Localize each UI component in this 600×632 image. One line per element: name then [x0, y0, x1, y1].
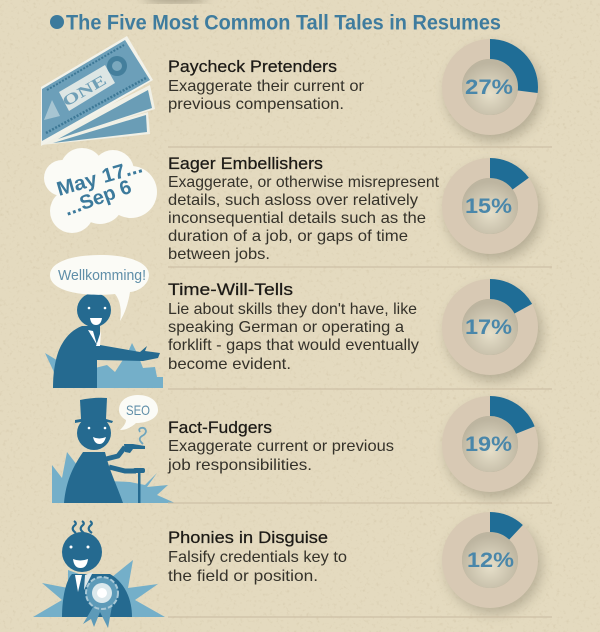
- icon: greeting figure: [45, 283, 163, 388]
- description: Eager Embellishers: [168, 174, 440, 263]
- icon: dollar bills: [41, 36, 155, 146]
- donut chart: 12%: 12%: [467, 549, 514, 572]
- description: Time-Will-Tells: [168, 301, 419, 373]
- panel: Time-Will-Tells: [45, 255, 542, 388]
- speech bubble: Wellkomming!: Wellkomming!: [58, 268, 146, 284]
- heading: Phonies in Disguise: Phonies in Disguise: [168, 528, 328, 547]
- panel: Paycheck Pretenders: [41, 36, 542, 146]
- description: Eager Embellishers: between jobs.: [168, 246, 270, 263]
- title: The Five Most Common Tall Tales in Resumes: [66, 12, 501, 34]
- icon: date cloud: [44, 148, 157, 233]
- donut chart: 12%: [446, 518, 542, 614]
- description: Paycheck Pretenders: [168, 78, 365, 113]
- description: Eager Embellishers: Exaggerate, or otherwise misrepresent: [168, 174, 440, 191]
- donut chart: 15%: 15%: [465, 195, 512, 218]
- donut chart: 19%: 19%: [465, 433, 512, 456]
- donut chart: 19%: [446, 402, 542, 498]
- heading: Paycheck Pretenders: Paycheck Pretenders: [168, 57, 337, 76]
- speech bubble: Wellkomming!: [50, 255, 149, 321]
- description: Eager Embellishers: details, such asloss over relatively: [168, 192, 418, 209]
- icon: dollar bills: ONE: [60, 73, 110, 110]
- description: Eager Embellishers: inconsequential details such as the: [168, 210, 426, 227]
- donut chart: 27%: [446, 45, 542, 141]
- description: Phonies in Disguise: Falsify credentials key to: [168, 549, 347, 566]
- donut chart: 17%: [446, 285, 542, 381]
- panel: Fact-Fudgers: [52, 395, 542, 503]
- description: Paycheck Pretenders: Exaggerate their current or: [168, 78, 365, 95]
- speech bubble: SEO: SEO: [126, 402, 150, 418]
- icon: date cloud: ...Sep 6: [61, 176, 134, 221]
- description: Fact-Fudgers: job responsibilities.: [167, 457, 312, 474]
- description: Paycheck Pretenders: previous compensation.: [168, 96, 344, 113]
- speech bubble: SEO: [119, 395, 158, 430]
- description: Time-Will-Tells: speaking German or operating a: [168, 319, 404, 336]
- description: Time-Will-Tells: forklift - gaps that would eventually: [168, 337, 419, 354]
- description: Time-Will-Tells: Lie about skills they don't have, like: [168, 301, 417, 318]
- icon: figure with rosette: [33, 521, 165, 628]
- panel: Eager Embellishers: [44, 148, 542, 263]
- description: Time-Will-Tells: become evident.: [168, 356, 291, 373]
- icon: top-hat figure: [52, 398, 175, 503]
- donut chart: 27%: 27%: [465, 76, 513, 99]
- heading: Fact-Fudgers: Fact-Fudgers: [168, 418, 272, 437]
- description: Phonies in Disguise: the field or position.: [168, 568, 318, 585]
- panel: Phonies in Disguise: [33, 518, 542, 628]
- heading: Eager Embellishers: Eager Embellishers: [168, 154, 323, 173]
- description: Fact-Fudgers: Exaggerate current or previous: [168, 438, 394, 455]
- icon: date cloud: May 17...: [54, 155, 145, 201]
- description: Phonies in Disguise: [168, 549, 347, 585]
- heading: Time-Will-Tells: Time-Will-Tells: [168, 280, 293, 299]
- donut chart: 17%: 17%: [465, 316, 512, 339]
- description: Eager Embellishers: duration of a job, or gaps of time: [168, 228, 408, 245]
- description: Fact-Fudgers: [167, 438, 394, 474]
- donut chart: 15%: [446, 164, 542, 260]
